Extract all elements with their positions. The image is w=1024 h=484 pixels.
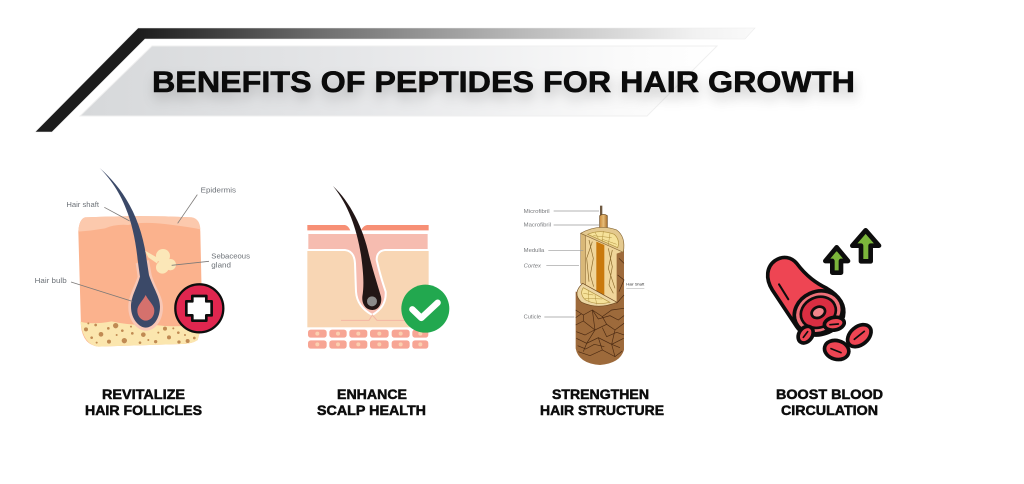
banner dark bar (35, 28, 755, 132)
caption: revitalize hair follicles: REVITALIZE (102, 387, 185, 402)
caption: revitalize hair follicles (85, 387, 202, 418)
caption: strengthen hair structure: HAIR STRUCTURE (540, 403, 664, 418)
caption: enhance scalp health: SCALP HEALTH (317, 403, 426, 418)
label: epidermis: Epidermis (201, 188, 237, 195)
icon: green check badge (401, 285, 449, 333)
vessel inner ring (796, 291, 841, 334)
label: macrofibril: Macrofibril (524, 222, 551, 228)
label: sebaceous gland: Sebaceous (211, 253, 251, 260)
label: cortex: Cortex (524, 263, 541, 269)
cortex left wall (581, 233, 586, 286)
medulla (596, 242, 604, 295)
caption: boost blood circulation (776, 387, 883, 418)
title: BENEFITS OF PEPTIDES FOR HAIR GROWTH (152, 66, 855, 99)
blood cell (843, 320, 875, 351)
cuticle body (576, 248, 624, 365)
caption: enhance scalp health: ENHANCE (337, 387, 407, 402)
macrofibril (600, 214, 607, 237)
leader lines (544, 211, 644, 317)
sebaceous gland (145, 249, 176, 274)
caption: boost blood circulation: BOOST BLOOD (776, 387, 883, 402)
vessel body (768, 257, 844, 335)
fat cells (84, 322, 196, 344)
cut top ring (581, 227, 624, 252)
central cell (810, 305, 827, 320)
hair strand and bulb (333, 186, 381, 310)
fat layer (80, 321, 202, 347)
hair shaft and bulb (100, 168, 160, 328)
caption: strengthen hair structure (540, 387, 664, 418)
label: gland: gland (211, 263, 231, 270)
caption: revitalize hair follicles: HAIR FOLLICLES (85, 403, 202, 418)
dermis layer (307, 233, 429, 249)
dermal papilla (137, 295, 154, 321)
callout lines (71, 195, 209, 301)
icon: small arrow up (825, 247, 848, 273)
banner light panel (80, 46, 717, 116)
skin block (78, 216, 202, 347)
label: hair shaft: Hair shaft (66, 202, 99, 209)
label: microfibril: Microfibril (524, 209, 550, 215)
label: cuticle: Cuticle (524, 314, 541, 320)
epidermis layer (78, 216, 200, 232)
bulb centre (367, 296, 377, 306)
icon: large arrow up (852, 230, 879, 261)
illustration: hair structure (524, 206, 644, 365)
label: hair shaft: Hair Shaft (626, 283, 644, 287)
skin cells (308, 330, 428, 349)
illustration: blood vessel with arrows (768, 230, 879, 362)
lower cells (582, 288, 610, 304)
label: hair bulb: Hair bulb (35, 278, 67, 285)
caption: boost blood circulation: CIRCULATION (781, 403, 878, 418)
title shadow: BENEFITS OF PEPTIDES FOR HAIR GROWTH (153, 73, 856, 106)
illustration: hair follicle diagram (35, 168, 251, 347)
base line (341, 315, 405, 320)
cortex fibres (587, 240, 615, 293)
top edge mask (307, 231, 429, 233)
caption: strengthen hair structure: STRENGTHEN (552, 387, 649, 402)
top skin layer (307, 225, 429, 230)
icon: medical cross badge (175, 284, 223, 332)
follicle sheath (128, 260, 163, 331)
vessel opening (787, 283, 849, 341)
follicle with white outline (307, 233, 429, 315)
blood cell (823, 316, 845, 332)
blood cell (795, 323, 816, 346)
vessel highlight (779, 284, 788, 299)
illustration: scalp cross-section (307, 186, 449, 349)
upper cells (588, 231, 618, 248)
microfibril (600, 206, 602, 219)
caption: enhance scalp health (317, 387, 426, 418)
lower dermis (307, 251, 429, 327)
label: medulla: Medulla (524, 248, 544, 254)
cell nuclei (315, 332, 422, 346)
title banner (35, 28, 856, 132)
blood cell (822, 338, 851, 362)
cuticle scales (576, 258, 624, 357)
lower cut ring (577, 283, 617, 306)
cortex panel (581, 233, 622, 302)
